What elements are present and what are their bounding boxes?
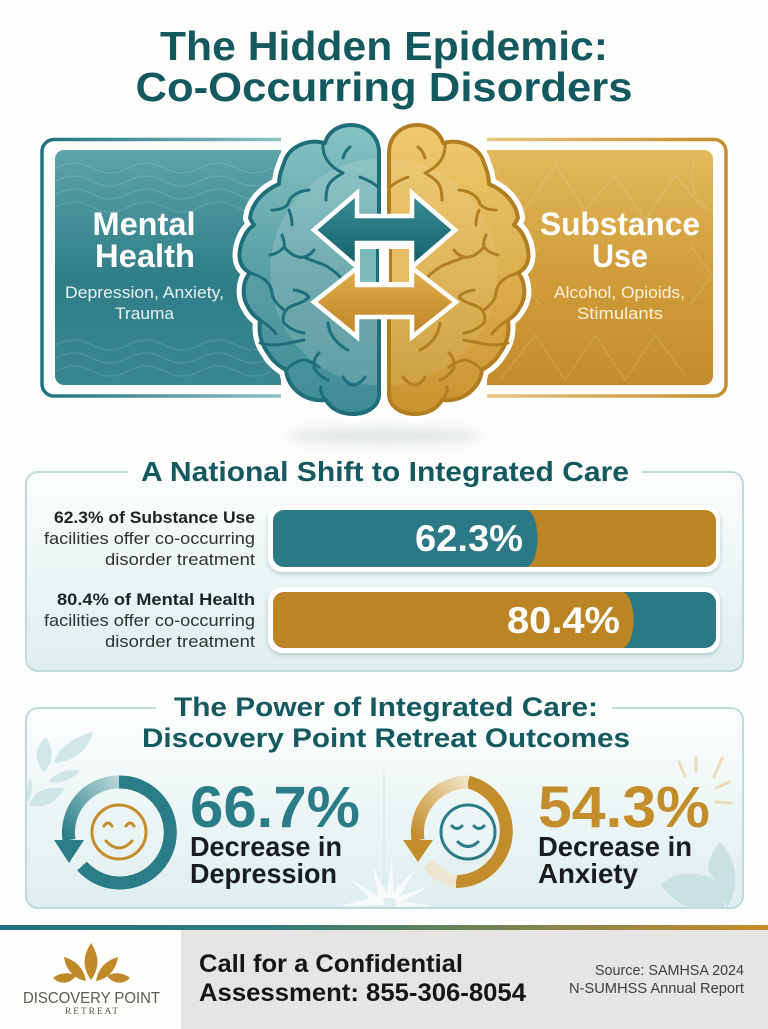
brain left hemisphere: [232, 123, 381, 416]
panel: substance use: [487, 140, 726, 396]
text: substance use examples: [554, 284, 685, 323]
text: decrease in anxiety: Decrease in: [538, 831, 692, 862]
call to action: [199, 950, 526, 1007]
heading: mental health: Health: [95, 238, 195, 274]
bar: 62.3 percent: [268, 505, 720, 572]
text: mental health examples: Depression, Anxiety,: [65, 284, 224, 302]
text: decrease in anxiety: [538, 831, 692, 889]
icon: brain: [240, 125, 528, 414]
icon: anxiety ring with arrow: [403, 782, 506, 882]
label: substance use statistic: [44, 509, 255, 569]
text: mental health examples: [65, 284, 224, 323]
label: substance use statistic: facilities offer co-occurring: [44, 530, 255, 548]
text: substance use examples: Stimulants: [577, 305, 663, 323]
text: substance use examples: Alcohol, Opioids,: [554, 284, 685, 302]
heading: outcomes: [142, 692, 630, 753]
brain right hemisphere: [387, 123, 536, 416]
heading: substance use: [540, 206, 700, 274]
center connector between arrows: [355, 244, 414, 286]
label: mental health statistic: facilities offer co-occurring: [44, 612, 255, 630]
label: mental health statistic: [44, 591, 255, 651]
label: mental health statistic: disorder treatment: [105, 633, 255, 651]
text: decrease in depression: [190, 831, 342, 889]
brain shadow: [284, 430, 484, 442]
decoration: sun rays: [679, 758, 731, 803]
arrow: teal bidirectional: [314, 193, 455, 267]
call to action: Assessment: 855-306-8054: [199, 979, 526, 1007]
bar: 80.4 percent: 80.4%: [507, 600, 620, 641]
title: The Hidden Epidemic:: [160, 23, 608, 69]
title: Co-Occurring Disorders: [136, 64, 632, 110]
text: decrease in depression: Decrease in: [190, 831, 342, 862]
footer: [0, 925, 768, 1029]
decoration: leaves lower right: [661, 842, 736, 907]
text: decrease in depression: Depression: [190, 858, 337, 889]
title: [136, 23, 632, 110]
call to action: Call for a Confidential: [199, 950, 463, 978]
text: decrease in anxiety: Anxiety: [538, 858, 638, 889]
source note: N-SUMHSS Annual Report: [569, 980, 745, 997]
logo: discovery point retreat: DISCOVERY POINT: [23, 990, 160, 1007]
stat: 54.3 percent: 54.3%: [538, 775, 710, 840]
panel: outcomes: [26, 692, 743, 908]
heading: outcomes: Discovery Point Retreat Outcomes: [142, 723, 630, 753]
bar: 62.3 percent: 62.3%: [415, 518, 523, 559]
label: mental health statistic: 80.4% of Mental Health: [57, 591, 255, 609]
stat: 66.7 percent: 66.7%: [190, 775, 360, 840]
heading: national shift: A National Shift to Integrated Care: [141, 456, 629, 487]
arrow: gold bidirectional: [314, 268, 456, 337]
source note: [569, 962, 745, 997]
heading: substance use: Use: [592, 238, 648, 274]
bar: 80.4 percent: [268, 587, 720, 653]
heading: mental health: [92, 206, 196, 274]
panel: national shift: [26, 456, 743, 671]
logo: discovery point retreat: [23, 943, 160, 1017]
decoration: starburst: [340, 860, 432, 907]
divider: [383, 772, 385, 885]
label: substance use statistic: disorder treatment: [105, 551, 255, 569]
icon: smiling face: [92, 805, 146, 859]
label: substance use statistic: 62.3% of Substance Use: [54, 509, 255, 527]
decoration: leaves upper left: [26, 732, 93, 806]
logo: discovery point retreat: RETREAT: [65, 1007, 118, 1017]
heading: outcomes: The Power of Integrated Care:: [174, 692, 598, 722]
text: mental health examples: Trauma: [115, 305, 175, 323]
icon: depression ring with arrow: [54, 782, 170, 883]
source note: Source: SAMHSA 2024: [595, 962, 744, 979]
icon: calm face: [441, 805, 495, 859]
panel: mental health: [42, 140, 281, 396]
heading: mental health: Mental: [92, 206, 196, 242]
heading: substance use: Substance: [540, 206, 700, 242]
